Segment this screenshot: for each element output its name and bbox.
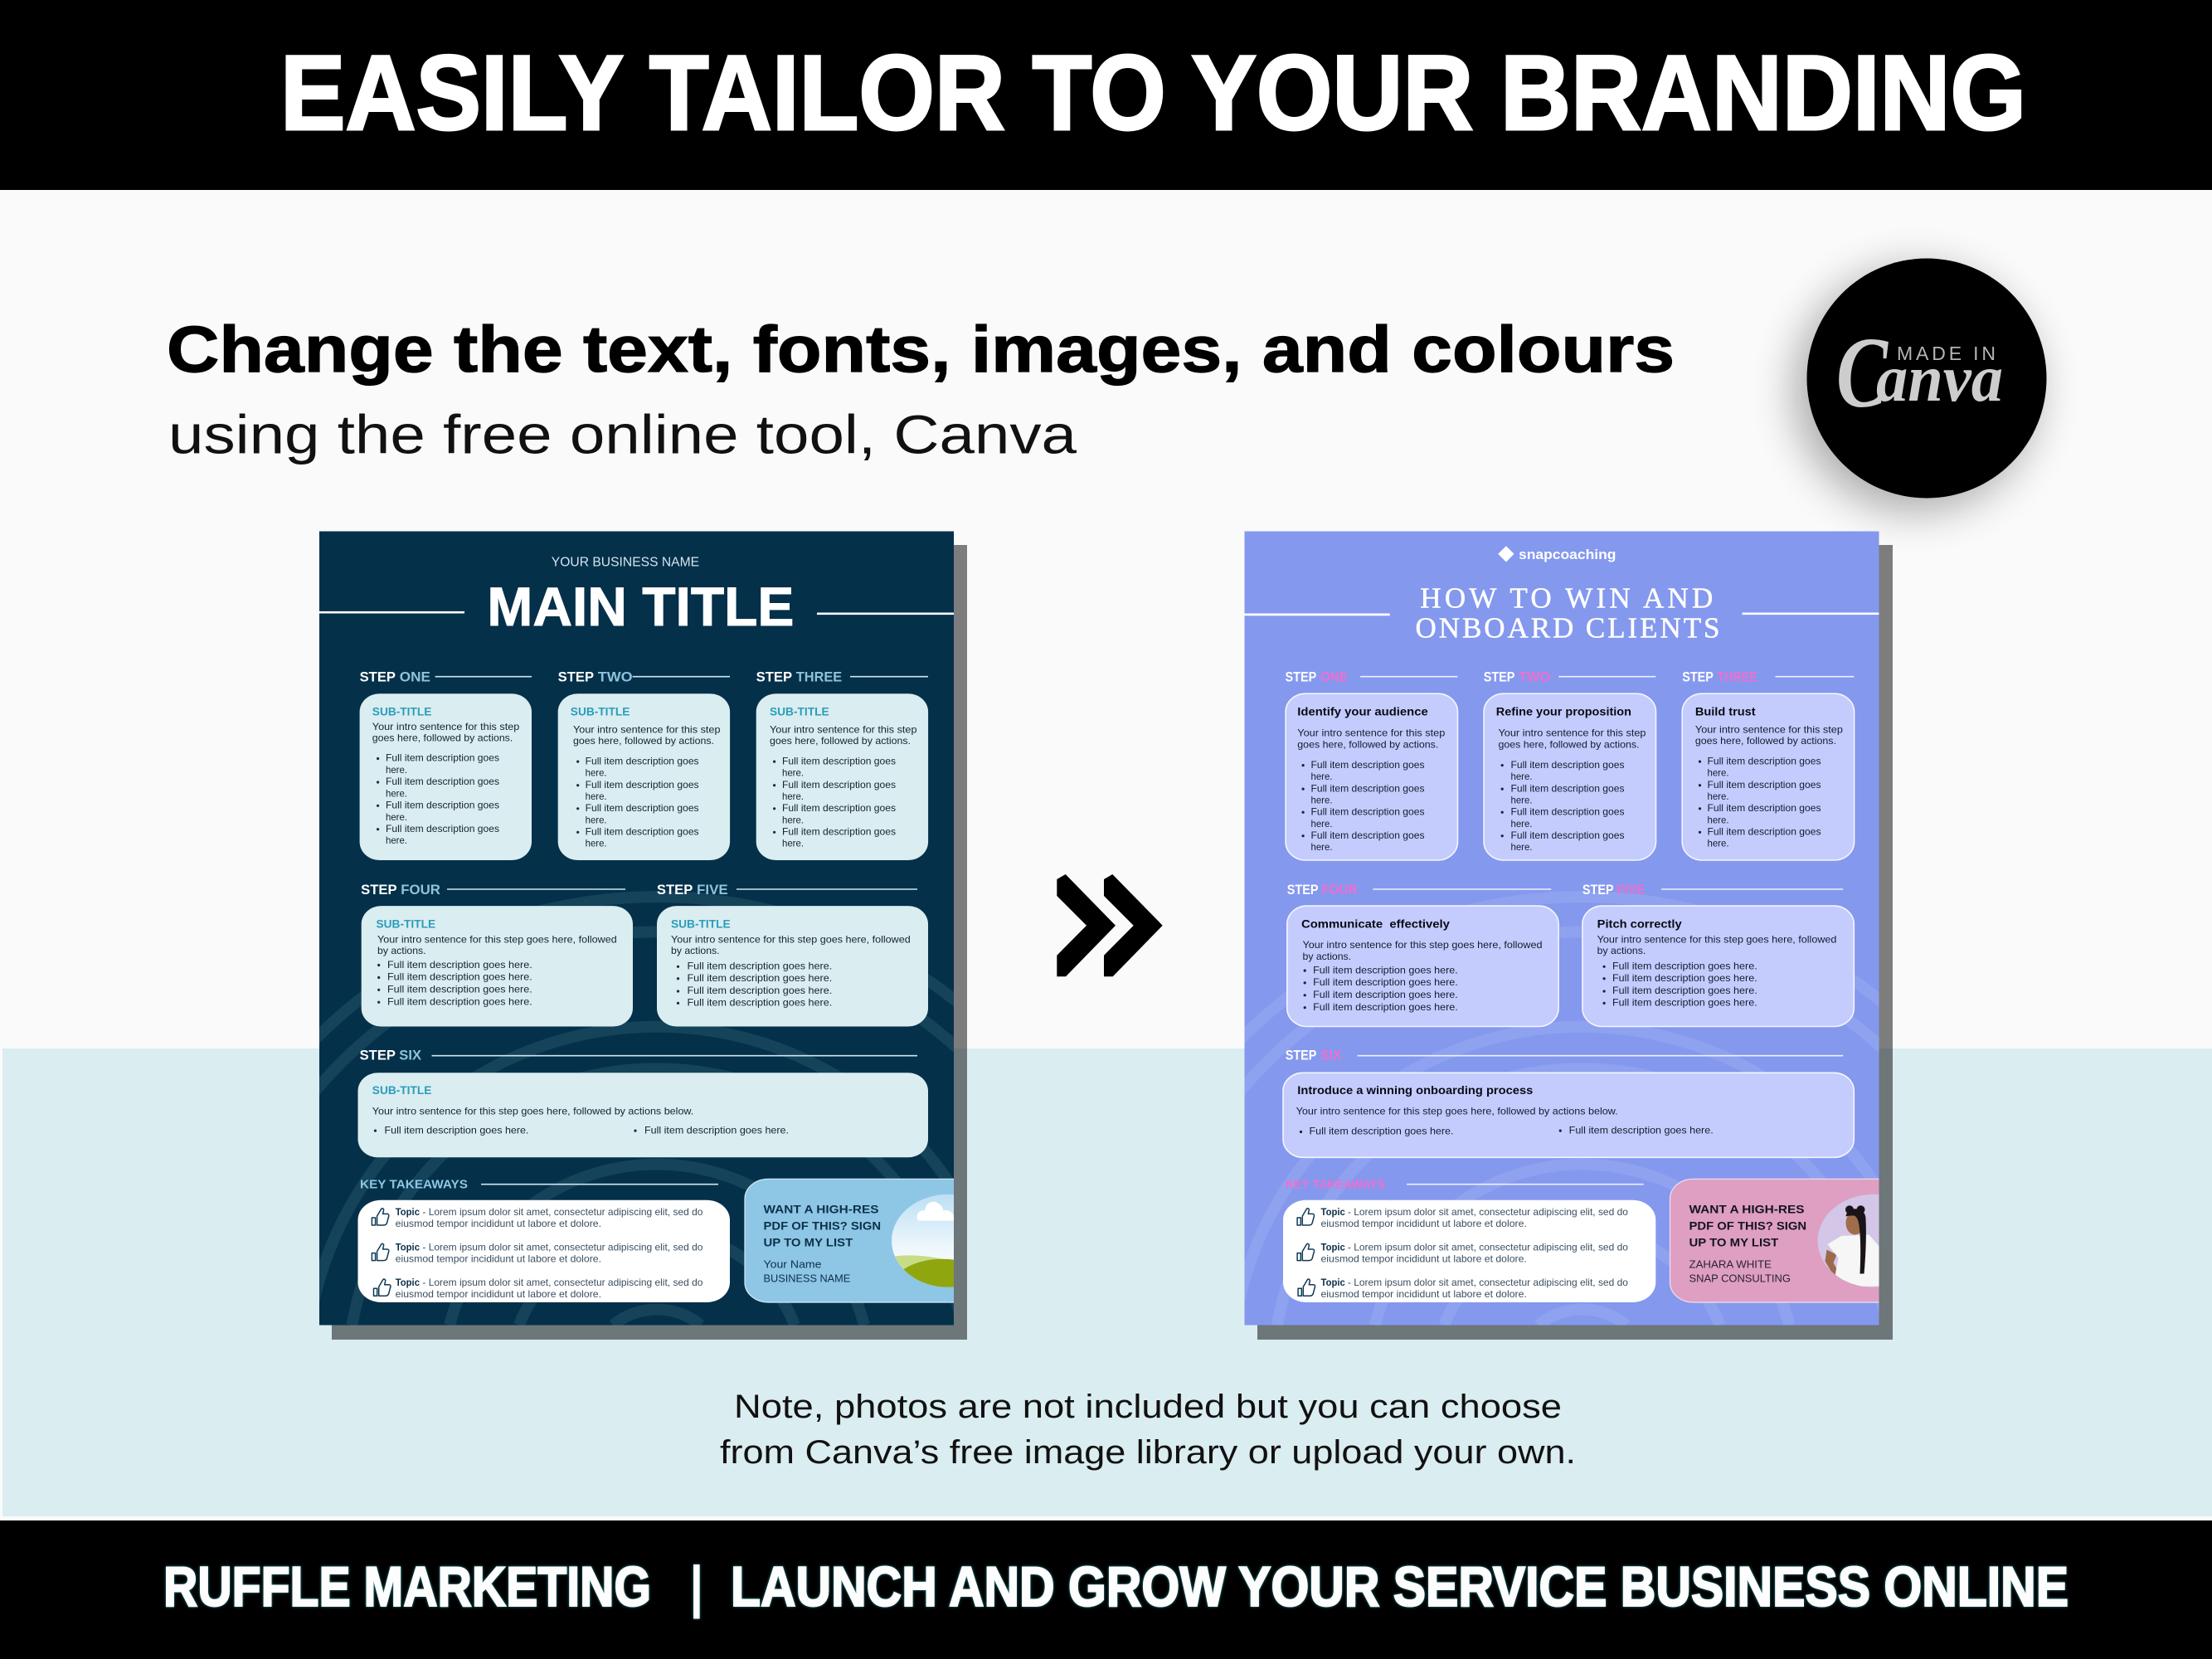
panel: right customised poster — [1244, 531, 1879, 1326]
card: step six: Full item description goes here. — [385, 1124, 529, 1136]
card: identify your audience: Identify your audience — [1297, 706, 1428, 718]
card: pitch correctly: Your intro sentence for this step goes here, followed — [1597, 934, 1836, 946]
card: identify your audience: here. — [1310, 771, 1332, 782]
card: refine your proposition: here. — [1511, 794, 1533, 805]
card: identify your audience: here. — [1310, 841, 1332, 853]
card: step two: goes here, followed by actions. — [573, 735, 714, 747]
card: step two — [558, 693, 730, 860]
card: step four: Full item description goes here. — [387, 971, 532, 983]
takeaway three — [1320, 1277, 1628, 1300]
card: build trust: goes here, followed by actions. — [1695, 735, 1836, 747]
step six heading — [1286, 1048, 1843, 1063]
card: step three: Full item description goes — [782, 826, 896, 838]
card: step six — [358, 1073, 928, 1157]
card: build trust: here. — [1707, 766, 1728, 778]
step three heading — [1682, 670, 1854, 685]
card: build trust: Full item description goes — [1707, 802, 1821, 814]
panel: takeaways — [1283, 1200, 1655, 1302]
card: winning onboarding process: Your intro sentence for this step goes here, followed by actions below. — [1296, 1105, 1618, 1117]
card: pitch correctly — [1582, 906, 1854, 1027]
card: refine your proposition: Refine your proposition — [1496, 706, 1631, 718]
call to action panel: PDF OF THIS? SIGN — [1689, 1219, 1806, 1232]
card: communicate effectively: Your intro sentence for this step goes here, followed — [1302, 939, 1543, 951]
shadow: right poster — [1257, 545, 1893, 1340]
image placeholder: landscape — [892, 1194, 954, 1287]
takeaway three: - Lorem ipsum dolor sit amet, consectetur adipiscing elit, sed do — [1348, 1277, 1628, 1288]
card: refine your proposition: here. — [1511, 841, 1533, 853]
call to action panel: UP TO MY LIST — [1689, 1235, 1779, 1248]
card: step two: Full item description goes — [586, 779, 699, 791]
card: step six: Your intro sentence for this step goes here, followed by actions below. — [372, 1105, 693, 1117]
banner title: EASILY TAILOR TO YOUR BRANDING — [280, 34, 2026, 153]
takeaway three: eiusmod tempor incididunt ut labore et dolore. — [396, 1289, 601, 1300]
bottom banner — [0, 1520, 2212, 1659]
step four heading: STEP — [1287, 883, 1319, 898]
card: step four: Full item description goes here. — [387, 984, 532, 995]
card: step one — [360, 693, 532, 860]
takeaway one: Topic — [1320, 1207, 1345, 1218]
card: identify your audience: here. — [1310, 794, 1332, 805]
takeaway one: - Lorem ipsum dolor sit amet, consectetur adipiscing elit, sed do — [1348, 1207, 1628, 1218]
card: identify your audience: Your intro sentence for this step — [1297, 727, 1446, 738]
main title: MAIN TITLE — [487, 576, 794, 637]
step four heading — [361, 883, 625, 898]
card: build trust: here. — [1707, 838, 1728, 849]
card: step two: here. — [586, 838, 607, 849]
card: step six: Full item description goes here. — [644, 1124, 789, 1136]
card: step one: Full item description goes — [386, 752, 499, 764]
takeaway two: - Lorem ipsum dolor sit amet, consectetur adipiscing elit, sed do — [1348, 1242, 1628, 1253]
card: build trust: Full item description goes — [1707, 779, 1821, 791]
card: step one: SUB-TITLE — [372, 706, 431, 718]
card: build trust: here. — [1707, 815, 1728, 826]
call to action panel — [744, 1178, 954, 1303]
card: step five — [657, 906, 928, 1027]
step one heading: ONE — [400, 670, 430, 685]
step two heading — [1484, 670, 1655, 685]
card: communicate effectively: Communicate effectively — [1301, 918, 1450, 931]
card: step four: Full item description goes here. — [387, 959, 532, 971]
card: step five: Full item description goes here. — [687, 985, 832, 996]
card: communicate effectively: Full item description goes here. — [1313, 1001, 1458, 1013]
card: step one: here. — [386, 834, 407, 846]
card: step one: here. — [386, 764, 407, 776]
top banner — [0, 0, 2212, 190]
card: step four: by actions. — [377, 945, 426, 956]
badge: made in Canva: C — [1836, 317, 1889, 429]
poster title: ONBOARD CLIENTS — [1415, 612, 1720, 645]
card: step three: Full item description goes — [782, 755, 896, 766]
note: from Canva’s free image library or upload your own. — [720, 1434, 1576, 1471]
key takeaways heading: KEY TAKEAWAYS — [360, 1178, 468, 1191]
card: communicate effectively — [1287, 906, 1558, 1027]
card: step one: Full item description goes — [386, 823, 499, 834]
card: step three: goes here, followed by actions. — [770, 735, 911, 747]
card: pitch correctly: Full item description goes here. — [1612, 997, 1757, 1009]
step one heading: ONE — [1320, 670, 1348, 685]
takeaway two: eiusmod tempor incididunt ut labore et dolore. — [396, 1254, 601, 1265]
card: step one: Full item description goes — [386, 776, 499, 787]
background: teal band — [2, 1048, 2212, 1516]
takeaway one: Topic — [396, 1207, 421, 1218]
call to action panel: PDF OF THIS? SIGN — [763, 1219, 881, 1232]
takeaway three: Topic — [396, 1277, 421, 1288]
takeaway two: Topic — [1320, 1242, 1345, 1253]
card: build trust — [1682, 693, 1855, 860]
card: refine your proposition: goes here, followed by actions. — [1498, 738, 1639, 750]
step five heading: FIVE — [1616, 883, 1645, 898]
card: step three: SUB-TITLE — [770, 706, 829, 718]
card: step five: by actions. — [671, 945, 720, 956]
card: refine your proposition — [1484, 693, 1655, 860]
card: step five: SUB-TITLE — [671, 918, 731, 931]
card: step six: SUB-TITLE — [372, 1084, 431, 1097]
card: identify your audience: Full item description goes — [1310, 830, 1425, 841]
step four heading: FOUR — [401, 883, 440, 898]
call to action panel: ZAHARA WHITE — [1689, 1258, 1772, 1270]
step three heading: STEP — [756, 670, 792, 685]
step four heading: FOUR — [1322, 883, 1357, 898]
takeaway two: - Lorem ipsum dolor sit amet, consectetur adipiscing elit, sed do — [422, 1242, 702, 1253]
step three heading: THREE — [796, 670, 842, 685]
step one heading: STEP — [1286, 670, 1316, 685]
card: step three: Full item description goes — [782, 779, 896, 791]
takeaway one: eiusmod tempor incididunt ut labore et dolore. — [396, 1219, 601, 1229]
heading: Change the text, fonts, images, and colours — [167, 312, 1675, 386]
card: identify your audience — [1286, 693, 1458, 860]
card: step one: Full item description goes — [386, 800, 499, 811]
step two heading: TWO — [598, 670, 633, 685]
card: identify your audience: Full item description goes — [1310, 759, 1425, 771]
call to action panel: WANT A HIGH-RES — [1689, 1202, 1805, 1215]
card: build trust: Your intro sentence for this step — [1695, 723, 1843, 735]
card: refine your proposition: Full item description goes — [1511, 782, 1625, 794]
photo: portrait — [1818, 1194, 1879, 1287]
card: step five: Full item description goes here. — [687, 961, 832, 972]
takeaway three: - Lorem ipsum dolor sit amet, consectetur adipiscing elit, sed do — [422, 1277, 702, 1288]
card: step one: here. — [386, 811, 407, 823]
call to action panel: BUSINESS NAME — [763, 1273, 850, 1285]
card: step five: Full item description goes here. — [687, 997, 832, 1009]
step four heading: STEP — [361, 883, 397, 898]
arrow: double chevron — [1057, 874, 1163, 976]
card: refine your proposition: Full item description goes — [1511, 759, 1625, 771]
takeaway one — [396, 1207, 702, 1229]
card: step two: here. — [586, 815, 607, 826]
step two heading — [558, 670, 730, 685]
step six heading: SIX — [1320, 1048, 1342, 1063]
note: Note, photos are not included but you can choose — [734, 1389, 1562, 1425]
step six heading — [360, 1048, 917, 1063]
card: identify your audience: here. — [1310, 818, 1332, 830]
card: step two: Full item description goes — [586, 826, 699, 838]
card: step two: Your intro sentence for this step — [573, 723, 721, 735]
card: step three: here. — [782, 791, 804, 802]
step three heading: STEP — [1682, 670, 1714, 685]
icon: thumbs up — [1297, 1209, 1315, 1225]
card: step five: Your intro sentence for this step goes here, followed — [671, 934, 911, 946]
takeaway three: eiusmod tempor incididunt ut labore et dolore. — [1320, 1289, 1527, 1300]
takeaway two — [396, 1242, 702, 1265]
card: identify your audience: goes here, followed by actions. — [1297, 738, 1438, 750]
shadow: left poster — [332, 545, 967, 1340]
card: winning onboarding process: Introduce a winning onboarding process — [1297, 1084, 1533, 1097]
badge: made in Canva: anva — [1876, 343, 2003, 416]
step two heading: TWO — [1519, 670, 1550, 685]
note — [720, 1389, 1576, 1471]
card: step two: SUB-TITLE — [571, 706, 630, 718]
card: communicate effectively: Full item description goes here. — [1313, 976, 1458, 988]
step six heading: SIX — [399, 1048, 421, 1063]
card: refine your proposition: Full item description goes — [1511, 805, 1625, 817]
card: step four: Your intro sentence for this step goes here, followed — [377, 934, 617, 946]
card: step three: Your intro sentence for this step — [770, 723, 917, 735]
card: step four: SUB-TITLE — [377, 918, 435, 931]
card: pitch correctly: Full item description goes here. — [1612, 972, 1757, 984]
badge: made in Canva — [1795, 259, 2047, 511]
card: step two: here. — [586, 766, 607, 778]
badge: made in Canva: MADE IN — [1897, 343, 1996, 364]
card: identify your audience: Full item description goes — [1310, 805, 1425, 817]
poster title — [1415, 582, 1720, 645]
card: refine your proposition: here. — [1511, 818, 1533, 830]
icon: thumbs up — [372, 1209, 389, 1225]
card: step two: Full item description goes — [586, 802, 699, 814]
card: step four — [362, 906, 633, 1027]
step five heading — [1582, 883, 1843, 898]
step two heading: STEP — [1484, 670, 1514, 685]
icon: thumbs up — [1297, 1243, 1315, 1261]
takeaway one: eiusmod tempor incididunt ut labore et dolore. — [1320, 1219, 1527, 1229]
call to action panel: SNAP CONSULTING — [1689, 1273, 1791, 1285]
step one heading — [360, 670, 532, 685]
takeaway two — [1320, 1242, 1628, 1265]
step one heading — [1286, 670, 1457, 685]
card: step one: goes here, followed by actions. — [372, 732, 513, 743]
icon: thumbs up — [372, 1243, 389, 1261]
takeaway two: eiusmod tempor incididunt ut labore et dolore. — [1320, 1254, 1527, 1265]
takeaway three: Topic — [1320, 1277, 1345, 1288]
card: step two: Full item description goes — [586, 755, 699, 766]
card: build trust: Full item description goes — [1707, 826, 1821, 838]
panel: left template poster — [319, 531, 954, 1326]
card: refine your proposition: Your intro sentence for this step — [1498, 727, 1646, 738]
key takeaways heading: KEY TAKEAWAYS — [1286, 1178, 1386, 1191]
step five heading: STEP — [1582, 883, 1614, 898]
step two heading: STEP — [558, 670, 594, 685]
takeaway two: Topic — [396, 1242, 421, 1253]
step one heading: STEP — [360, 670, 396, 685]
step five heading: FIVE — [697, 883, 728, 898]
card: refine your proposition: Full item description goes — [1511, 830, 1625, 841]
card: refine your proposition: here. — [1511, 771, 1533, 782]
call to action panel — [1669, 1178, 1879, 1303]
step three heading — [756, 670, 928, 685]
step three heading: THREE — [1717, 670, 1757, 685]
card: winning onboarding process — [1283, 1073, 1854, 1157]
card: step two: here. — [586, 791, 607, 802]
card: step four: Full item description goes here. — [387, 995, 532, 1007]
takeaway one: - Lorem ipsum dolor sit amet, consectetur adipiscing elit, sed do — [422, 1207, 702, 1218]
call to action panel: Your Name — [763, 1258, 822, 1270]
card: pitch correctly: by actions. — [1597, 945, 1646, 956]
takeaway three — [396, 1277, 702, 1300]
call to action panel: WANT A HIGH-RES — [763, 1202, 879, 1215]
card: step one: here. — [386, 787, 407, 799]
panel: takeaways — [358, 1200, 730, 1302]
logo: snapcoaching: snapcoaching — [1519, 547, 1616, 562]
step four heading — [1287, 883, 1551, 898]
card: step three: Full item description goes — [782, 802, 896, 814]
bottom banner: | — [689, 1555, 704, 1618]
step five heading: STEP — [657, 883, 693, 898]
card: pitch correctly: Full item description goes here. — [1612, 985, 1757, 996]
card: step five: Full item description goes here. — [687, 972, 832, 984]
card: step one: Your intro sentence for this step — [372, 721, 520, 732]
takeaway one — [1320, 1207, 1628, 1229]
card: communicate effectively: Full item description goes here. — [1313, 989, 1458, 1000]
business name: YOUR BUSINESS NAME — [552, 555, 699, 569]
icon: thumbs up — [1298, 1279, 1315, 1296]
step six heading: STEP — [1286, 1048, 1316, 1063]
card: step three: here. — [782, 838, 804, 849]
card: build trust: Build trust — [1695, 706, 1756, 718]
step five heading — [657, 883, 917, 898]
card: step three: here. — [782, 766, 804, 778]
card: winning onboarding process: Full item description goes here. — [1569, 1124, 1714, 1136]
step six heading: STEP — [360, 1048, 396, 1063]
poster title: HOW TO WIN AND — [1420, 582, 1713, 614]
call to action panel: UP TO MY LIST — [763, 1235, 853, 1248]
card: step three: here. — [782, 815, 804, 826]
card: communicate effectively: Full item description goes here. — [1313, 964, 1458, 975]
sub heading: using the free online tool, Canva — [168, 403, 1077, 465]
bottom banner: RUFFLE MARKETING — [163, 1555, 651, 1618]
card: pitch correctly: Pitch correctly — [1597, 918, 1682, 931]
card: identify your audience: Full item description goes — [1310, 782, 1425, 794]
card: pitch correctly: Full item description goes here. — [1612, 961, 1757, 972]
card: step three — [756, 693, 928, 860]
card: build trust: here. — [1707, 791, 1728, 802]
card: communicate effectively: by actions. — [1302, 951, 1351, 962]
icon: thumbs up — [373, 1279, 391, 1296]
card: winning onboarding process: Full item description goes here. — [1309, 1126, 1454, 1137]
card: build trust: Full item description goes — [1707, 755, 1821, 766]
